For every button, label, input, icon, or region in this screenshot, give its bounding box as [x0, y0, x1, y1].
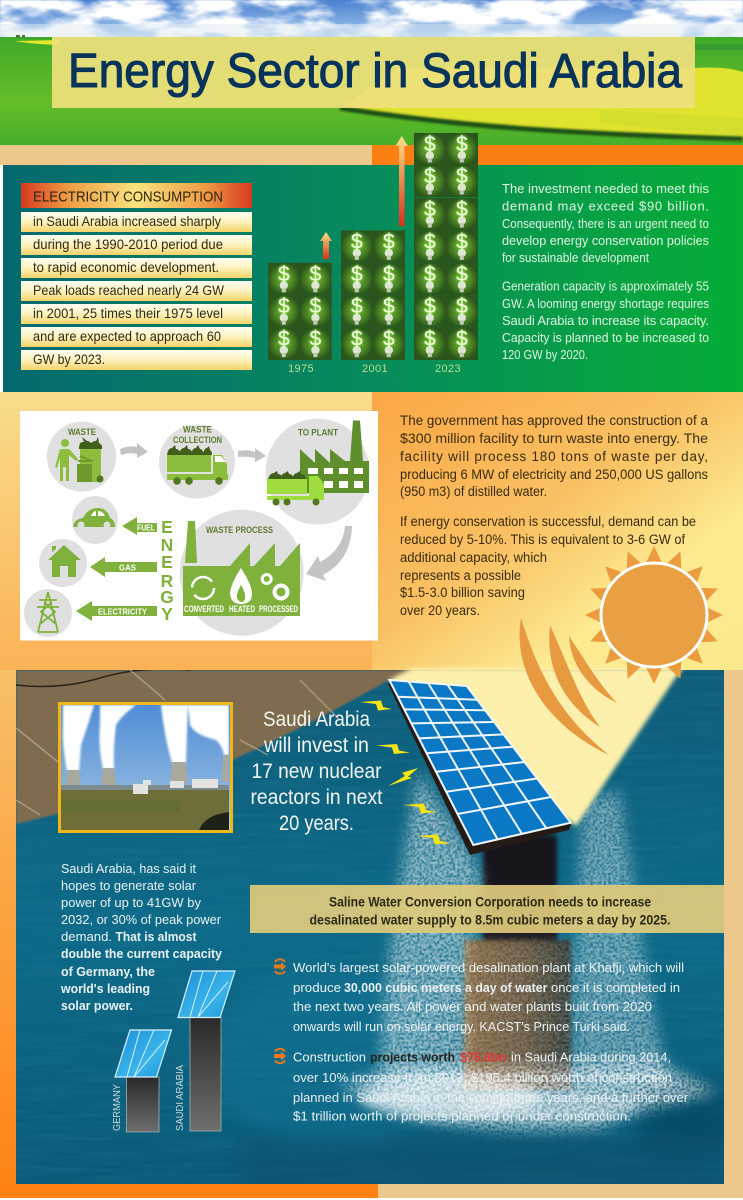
column 1975: $: [310, 295, 322, 318]
callout: saline water: [250, 885, 724, 933]
text block: energy conservation: over 20 years.: [400, 603, 480, 618]
text block: saudi solar vs germany: of Germany, the: [61, 964, 155, 979]
icon: waste process factory: WASTE PROCESS: [206, 525, 273, 536]
text block: consumption rows: GW by 2023.: [33, 351, 105, 367]
bullet: construction projects: over 10% increase from 2013, $195.4 billion worth of construction: [293, 1070, 672, 1085]
text block: saudi solar vs germany: demand.: [61, 929, 112, 944]
icon: waste collection truck: COLLECTION: [173, 435, 222, 446]
bar: Germany: [112, 1030, 172, 1132]
text block: consumption rows: during the 1990-2010 period due: [33, 236, 223, 252]
text: energy vertical: E: [161, 517, 173, 537]
text block: waste facility: facility will process 180 tons of waste per day,: [400, 449, 708, 464]
text block: waste facility: [400, 413, 708, 499]
chart year labels: [288, 363, 461, 375]
text block: waste facility: (950 m3) of distilled water.: [400, 484, 547, 499]
text block: saudi solar vs germany: 2032, or 30% of peak power: [61, 912, 222, 927]
text block: investment needed: demand may exceed $90 billion.: [502, 198, 709, 214]
pillar: [483, 835, 557, 945]
column 2001: $: [351, 295, 363, 318]
column 2001: $: [351, 328, 363, 351]
column 2023: $: [456, 263, 468, 286]
text block: saudi solar vs germany: double the current capacity: [61, 946, 223, 961]
text block: generation capacity: GW. A looming energy shortage requires: [502, 296, 709, 311]
text block: saudi solar vs germany: solar power.: [61, 998, 133, 1013]
column 2001: $: [383, 263, 395, 286]
bullet: construction projects: $75.6bn: [460, 1050, 506, 1064]
icon: bullet arrow: [274, 959, 286, 974]
text block: energy conservation: reduced by 5-10%. This is equivalent to 3-6 GW of: [400, 532, 685, 547]
bullet: Khafji plant: the next two years. All power and water plants built from 2020: [293, 999, 652, 1014]
icon: waste collection truck: [167, 425, 228, 485]
column 2023: $: [424, 133, 436, 156]
bullet: construction projects: planned in Saudi Arabia in the coming three years, and a further over: [293, 1090, 689, 1105]
text block: nuclear reactors: 20 years.: [279, 812, 354, 835]
chart year labels: 1975: [288, 363, 314, 375]
icon: power tower: [37, 592, 59, 632]
arrow: gas to house: [90, 557, 157, 577]
bullet: construction projects: $1 trillion worth of projects planned or under construction.: [293, 1108, 631, 1124]
arrow: growth 1975 to 2001: [320, 232, 332, 259]
chart: dollar bulb columns: [268, 133, 478, 360]
column 1975: $: [278, 263, 290, 286]
icon: waste process factory: [183, 521, 300, 616]
text block: energy conservation: [400, 514, 696, 618]
text block: saudi solar vs germany: world's leading: [60, 981, 150, 996]
column 2023: $: [456, 295, 468, 318]
gray circles: [24, 419, 370, 637]
icon: lightning bolts: [360, 700, 451, 844]
column 2023: $: [456, 198, 468, 221]
heading: electricity consumption: [21, 183, 252, 208]
text block: consumption rows: Peak loads reached nearly 24 GW: [33, 282, 225, 298]
chart: solar capacity Germany vs Saudi Arabia: [112, 971, 235, 1132]
sun light beam: [389, 668, 684, 826]
arrow: growth 2001 to 2023: [396, 136, 408, 226]
panel: electricity consumption: [3, 133, 743, 392]
text block: investment needed: develop energy conservation policies: [502, 233, 709, 248]
column 2001: [341, 230, 405, 360]
arrow: fuel to car: [122, 517, 157, 535]
column 1975: $: [278, 295, 290, 318]
text block: waste facility: producing 6 MW of electricity and 250,000 US gallons: [400, 467, 708, 482]
text block: generation capacity: Generation capacity is approximately 55: [502, 278, 709, 294]
text block: generation capacity: [502, 278, 709, 362]
arrow: waste to collection: [120, 443, 148, 458]
photo: water and dam background: [16, 669, 730, 1195]
text block: energy conservation: $1.5-3.0 billion saving: [400, 585, 525, 600]
column 2001: $: [351, 230, 363, 253]
bullet: Khafji plant: once it is completed in: [551, 980, 680, 995]
column 2023: $: [424, 295, 436, 318]
text block: energy conservation: represents a possible: [400, 568, 521, 583]
text: energy vertical: Y: [161, 604, 173, 624]
column 1975: $: [310, 263, 322, 286]
column 1975: [268, 263, 332, 360]
bullet: Khafji plant: produce: [293, 980, 341, 995]
column 2001: $: [383, 230, 395, 253]
bullet: construction projects: [274, 1049, 689, 1124]
icon: waste process factory: HEATED: [229, 604, 255, 614]
bar: Saudi Arabia: SAUDI ARABIA: [175, 1065, 186, 1131]
bullet: construction projects: projects worth: [370, 1050, 455, 1064]
bar: Saudi Arabia: [175, 971, 235, 1131]
text block: consumption rows: to rapid economic development.: [33, 259, 219, 275]
text: energy vertical: R: [161, 571, 174, 591]
icon: truck at plant: [267, 420, 369, 506]
icon: car: [73, 508, 115, 528]
arrow: electricity to tower: ELECTRICITY: [98, 606, 147, 616]
text block: saudi solar vs germany: Saudi Arabia, has said it: [61, 861, 196, 876]
text block: energy conservation: additional capacity, which: [400, 550, 547, 565]
icon: waste process factory: CONVERTED: [184, 604, 224, 614]
column 2023: $: [456, 133, 468, 156]
icon: waste process factory: PROCESSED: [259, 604, 298, 614]
chart year labels: 2023: [435, 363, 461, 375]
text block: consumption rows: in 2001, 25 times their 1975 level: [33, 305, 223, 321]
text: energy vertical: G: [160, 587, 174, 607]
icon: solar panel: [388, 680, 571, 855]
icon: radiating sun arcs: [520, 618, 617, 755]
text block: generation capacity: 120 GW by 2020.: [502, 347, 588, 362]
bar: Germany: GERMANY: [112, 1084, 123, 1131]
text block: investment needed: [502, 181, 710, 265]
column 2023: $: [424, 328, 436, 351]
text block: generation capacity: Saudi Arabia to increase its capacity.: [502, 313, 709, 328]
text block: nuclear reactors: reactors in next: [250, 786, 383, 809]
column 2023: [414, 133, 478, 360]
callout: saline water: desalinated water supply to 8.5m cubic meters a day by 2025.: [310, 912, 670, 928]
text block: saudi solar vs germany: hopes to generate solar: [61, 878, 197, 893]
text block: investment needed: Consequently, there is an urgent need to: [502, 216, 709, 231]
icon: bullet arrow: [274, 1049, 286, 1063]
column 2001: $: [351, 263, 363, 286]
water spray: [340, 770, 720, 1130]
column 2023: $: [456, 165, 468, 188]
chart year labels: 2001: [362, 363, 388, 375]
arrow: collection to plant: [238, 448, 266, 462]
text: energy vertical: E: [161, 552, 173, 572]
header landscape photo: [0, 0, 743, 145]
text block: waste facility: The government has approved the construction of a: [400, 413, 708, 428]
text block: nuclear reactors: 17 new nuclear: [252, 760, 382, 783]
text block: nuclear reactors: Saudi Arabia: [263, 708, 370, 731]
photo: nuclear plant: [60, 704, 232, 832]
column 2023: $: [456, 230, 468, 253]
column 1975: $: [310, 328, 322, 351]
text block: saudi solar vs germany: [60, 861, 223, 1013]
icon: truck at plant: TO PLANT: [298, 428, 338, 439]
column 2023: $: [424, 165, 436, 188]
arrow: plant to waste process: [306, 526, 352, 581]
column 1975: $: [278, 328, 290, 351]
callout: saline water: Saline Water Conversion Corporation needs to increase: [329, 894, 651, 910]
column 2023: $: [456, 328, 468, 351]
text block: generation capacity: Capacity is planned to be increased to: [502, 330, 709, 345]
column 2023: $: [424, 230, 436, 253]
bullet: Khafji plant: onwards will run on solar energy, KACST's Prince Turki said.: [293, 1019, 630, 1034]
text block: nuclear reactors: will invest in: [263, 734, 369, 757]
heading: electricity consumption: ELECTRICITY CONSUMPTION: [33, 188, 223, 206]
title banner: Energy Sector in Saudi Arabia: [68, 45, 682, 98]
bullet: Khafji plant: 30,000 cubic meters a day of water: [344, 980, 548, 995]
column 2023: $: [424, 263, 436, 286]
text block: energy conservation: If energy conservation is successful, demand can be: [400, 514, 696, 529]
bullet: Khafji plant: World's largest solar-powered desalination plant at Khafji, which will: [293, 960, 684, 975]
icon: sun: [585, 546, 723, 684]
column 2023: $: [424, 198, 436, 221]
arrow: fuel to car: FUEL: [137, 522, 155, 532]
text: energy vertical: [160, 517, 174, 624]
bullet: construction projects: in Saudi Arabia during 2014,: [511, 1050, 671, 1064]
text block: saudi solar vs germany: power of up to 41GW by: [61, 895, 201, 910]
icon: waste collection truck: WASTE: [183, 425, 212, 436]
arrow: electricity to tower: [76, 601, 157, 621]
icon: house: [48, 545, 81, 577]
panel: waste to energy diagram: [20, 411, 378, 640]
arrow: gas to house: GAS: [119, 562, 136, 572]
column 2001: $: [383, 295, 395, 318]
icon: waste person and bin: [55, 427, 104, 482]
text block: investment needed: The investment needed to meet this: [502, 181, 710, 196]
bullet: construction projects: Construction: [293, 1050, 366, 1064]
text block: investment needed: for sustainable development: [502, 250, 649, 265]
text block: consumption rows: in Saudi Arabia increased sharply: [33, 213, 221, 229]
icon: waste person and bin: WASTE: [68, 427, 96, 438]
bullet: Khafji plant: [274, 959, 684, 1034]
text block: consumption rows: and are expected to approach 60: [33, 328, 221, 344]
text block: saudi solar vs germany: That is almost: [116, 929, 197, 944]
text: energy vertical: N: [161, 535, 173, 555]
text block: waste facility: $300 million facility to turn waste into energy. The: [400, 431, 708, 446]
column 2001: $: [383, 328, 395, 351]
text block: consumption rows: [21, 212, 252, 370]
text block: nuclear reactors: [250, 708, 383, 835]
